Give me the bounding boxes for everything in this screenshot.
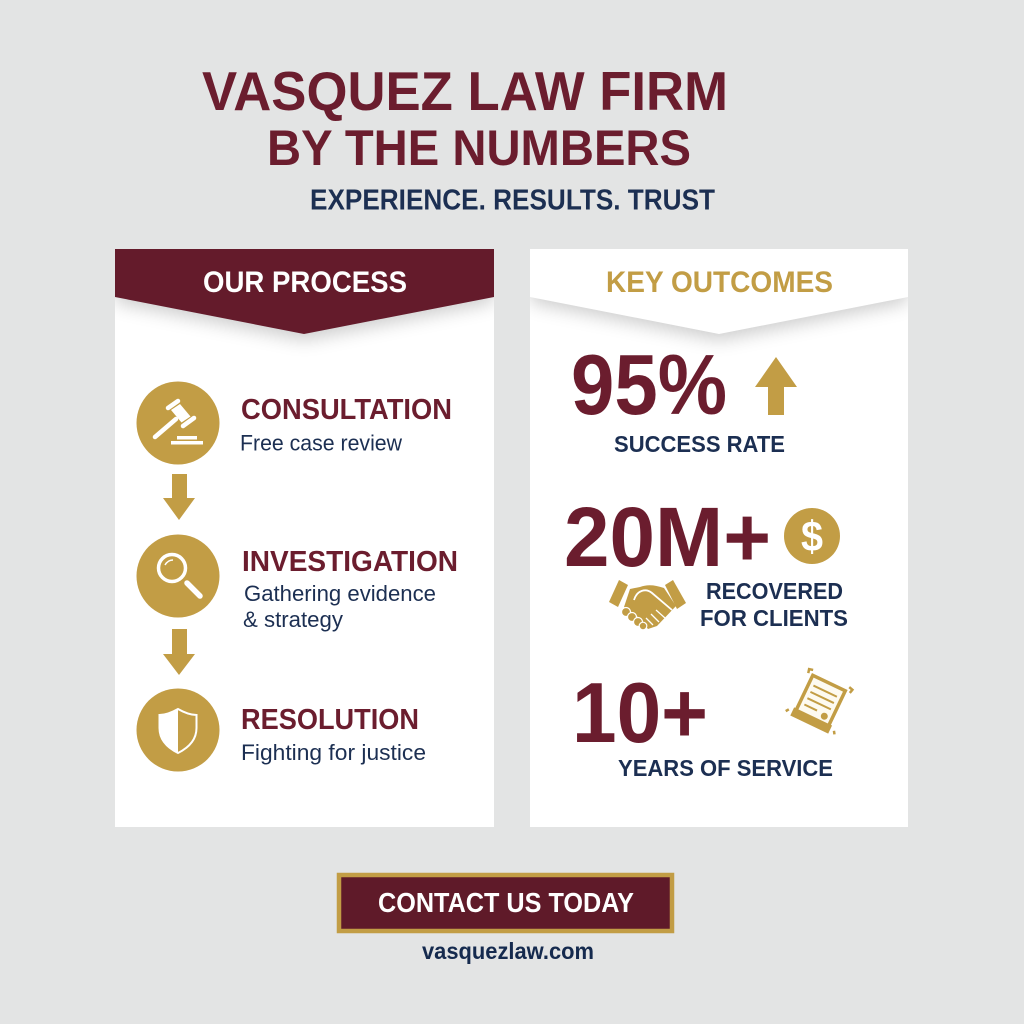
step: consultation: CONSULTATION xyxy=(241,394,452,426)
stat: 10+ years of service xyxy=(572,666,833,781)
arrow: step 2 to step 3 xyxy=(163,629,195,675)
title: BY THE NUMBERS xyxy=(267,120,691,176)
heading ribbon: our process xyxy=(115,249,494,334)
heading ribbon: key outcomes: KEY OUTCOMES xyxy=(606,266,833,299)
stat: 95% success rate: 95% xyxy=(571,338,727,433)
stat: 20M+ recovered for clients: 20M+ xyxy=(564,490,771,584)
stat: 20M+ recovered for clients: RECOVERED xyxy=(706,578,843,604)
step: investigation: Gathering evidence xyxy=(244,581,436,606)
step: investigation: & strategy xyxy=(243,607,343,632)
stat: 95% success rate: SUCCESS RATE xyxy=(614,431,785,457)
panel: our process xyxy=(115,249,494,827)
title xyxy=(202,60,728,176)
stat: 20M+ recovered for clients: FOR CLIENTS xyxy=(700,605,848,631)
subtitle: EXPERIENCE. RESULTS. TRUST xyxy=(310,184,715,216)
step: consultation: Free case review xyxy=(240,430,402,456)
call to action button xyxy=(339,875,672,931)
website: vasquezlaw.com xyxy=(422,938,594,964)
stat: 10+ years of service: YEARS OF SERVICE xyxy=(618,755,833,781)
step: investigation: INVESTIGATION xyxy=(242,546,458,578)
icon: shield xyxy=(136,688,220,772)
stat: 95% success rate xyxy=(571,338,785,457)
title: VASQUEZ LAW FIRM xyxy=(202,60,728,122)
heading ribbon: key outcomes xyxy=(530,249,908,334)
stat: 20M+ recovered for clients xyxy=(564,490,848,631)
call to action button: CONTACT US TODAY xyxy=(378,887,634,918)
step: resolution: RESOLUTION xyxy=(241,704,419,736)
step: resolution: Fighting for justice xyxy=(241,740,426,765)
icon: gavel xyxy=(136,382,220,464)
panel: key outcomes xyxy=(530,249,908,827)
icon: up arrow xyxy=(755,357,797,415)
step: resolution xyxy=(241,704,426,765)
arrow: step 1 to step 2 xyxy=(163,474,195,520)
step: consultation xyxy=(240,394,452,456)
stat: 10+ years of service: 10+ xyxy=(572,666,708,761)
icon: handshake xyxy=(609,580,686,630)
icon: scroll xyxy=(785,667,856,736)
icon: magnifying glass xyxy=(136,534,220,618)
step: investigation xyxy=(242,546,458,632)
heading ribbon: our process: OUR PROCESS xyxy=(203,266,407,299)
icon: dollar coin xyxy=(784,508,840,564)
icon: dollar coin: $ xyxy=(801,513,823,561)
